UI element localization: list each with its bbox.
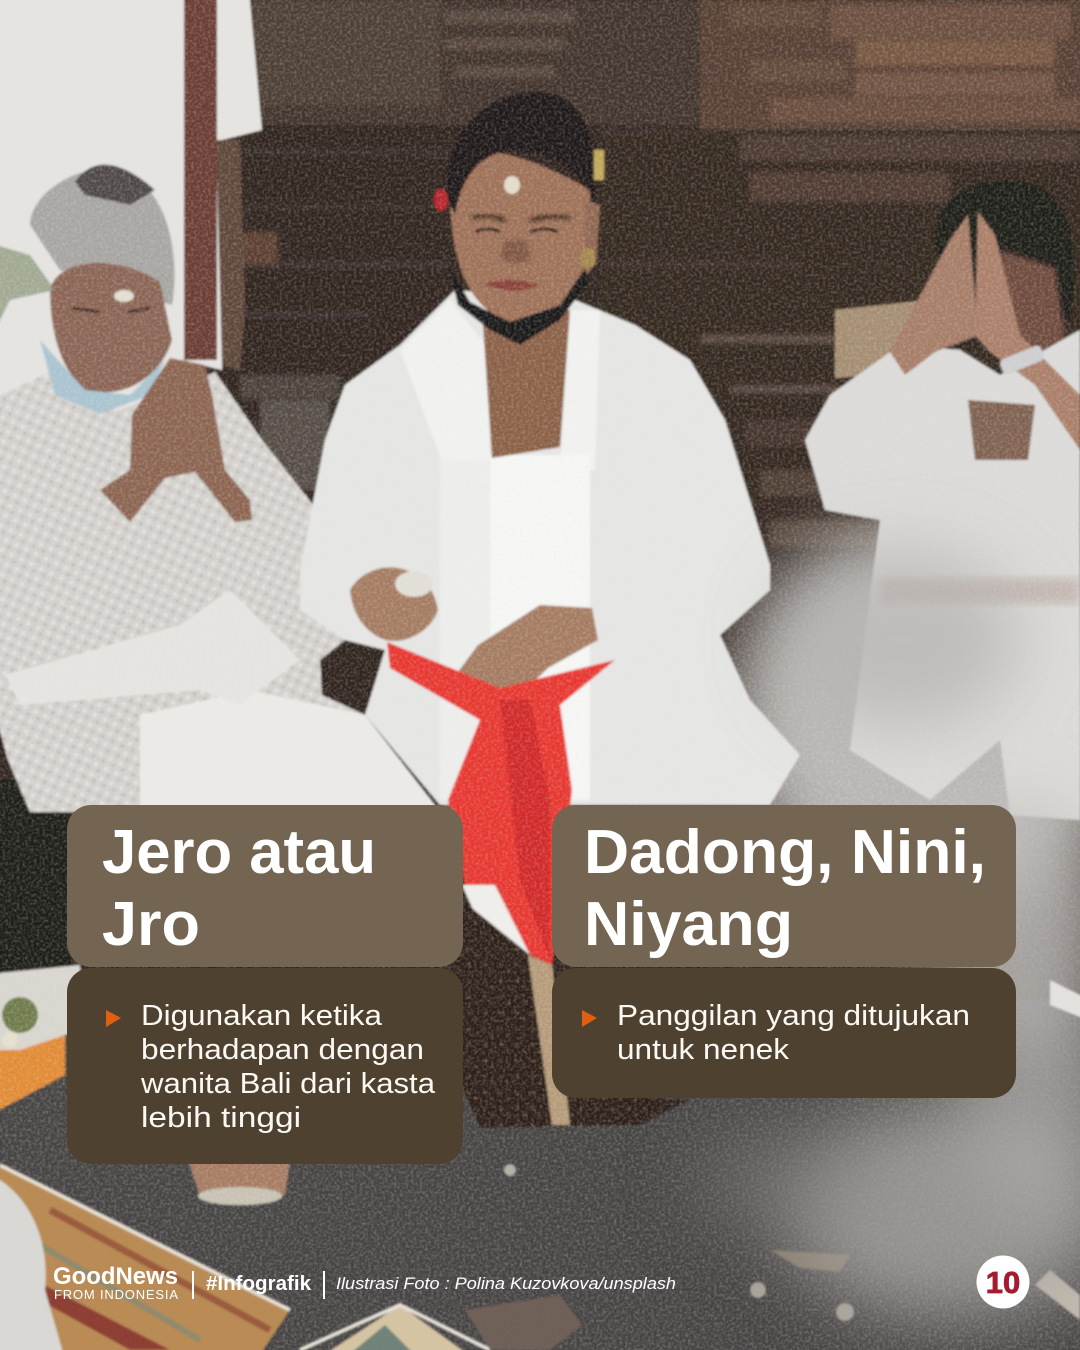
description text (140, 1000, 436, 1134)
white blouse (300, 290, 800, 805)
fallen leaves (465, 1164, 1080, 1350)
panel: Dadong, Nini, Niyang description (552, 968, 1016, 1098)
hashtag: #Infografik (206, 1273, 312, 1295)
central woman (300, 92, 800, 1128)
photo credit: Ilustrasi Foto : Polina Kuzovkova/unsplash (336, 1274, 676, 1293)
logo: GoodNews from Indonesia: GoodNews (53, 1263, 178, 1290)
logo: GoodNews from Indonesia: FROM INDONESIA (54, 1287, 178, 1302)
description text: untuk nenek (617, 1034, 790, 1066)
incense smoke (690, 550, 1080, 1320)
standing figure in white (0, 0, 262, 420)
cardboard box (835, 298, 945, 378)
smoke behind (730, 530, 1080, 910)
panel: Dadong, Nini, Niyang heading: Dadong, Nini, (584, 818, 986, 887)
offerings on left ground (0, 965, 80, 1120)
mats, leaves and smoke in the foreground (0, 550, 1080, 1350)
ground (0, 1000, 1080, 1350)
page number badge (976, 1256, 1030, 1308)
asphalt texture (0, 1100, 1080, 1350)
panel: Jero atau Jro description (67, 968, 463, 1164)
red sash (387, 642, 615, 965)
woven mats (0, 1155, 490, 1350)
head (450, 152, 590, 321)
neck and chest (482, 310, 570, 458)
description text: lebih tinggi (141, 1102, 301, 1134)
description text: Panggilan yang ditujukan (617, 1000, 970, 1032)
woman on left (0, 165, 440, 812)
white cloth corner (0, 1180, 68, 1350)
batik skirt (445, 900, 690, 1128)
icon: orange bullet (582, 1010, 597, 1027)
panel: Jero atau Jro heading: Jero atau (102, 818, 376, 887)
woman on right (805, 180, 1080, 820)
hands (350, 567, 438, 641)
description text: Digunakan ketika (141, 1000, 383, 1032)
panel: Jero atau Jro heading: Jro (102, 890, 200, 959)
panel: Dadong, Nini, Niyang heading (552, 805, 1016, 967)
description text: berhadapan dengan (141, 1034, 424, 1066)
panel: Jero atau Jro heading (67, 805, 463, 967)
face mask (448, 265, 590, 345)
grey hair (30, 169, 175, 305)
description text: wanita Bali dari kasta (140, 1068, 436, 1100)
bare feet (188, 1160, 290, 1205)
panel: Dadong, Nini, Niyang heading: Niyang (584, 890, 793, 959)
description text (617, 1000, 970, 1066)
page number badge: 10 (986, 1265, 1020, 1300)
icon: orange bullet (106, 1010, 121, 1027)
hair (447, 92, 595, 215)
footer (53, 1263, 676, 1302)
logo: GoodNews from Indonesia (53, 1263, 178, 1302)
